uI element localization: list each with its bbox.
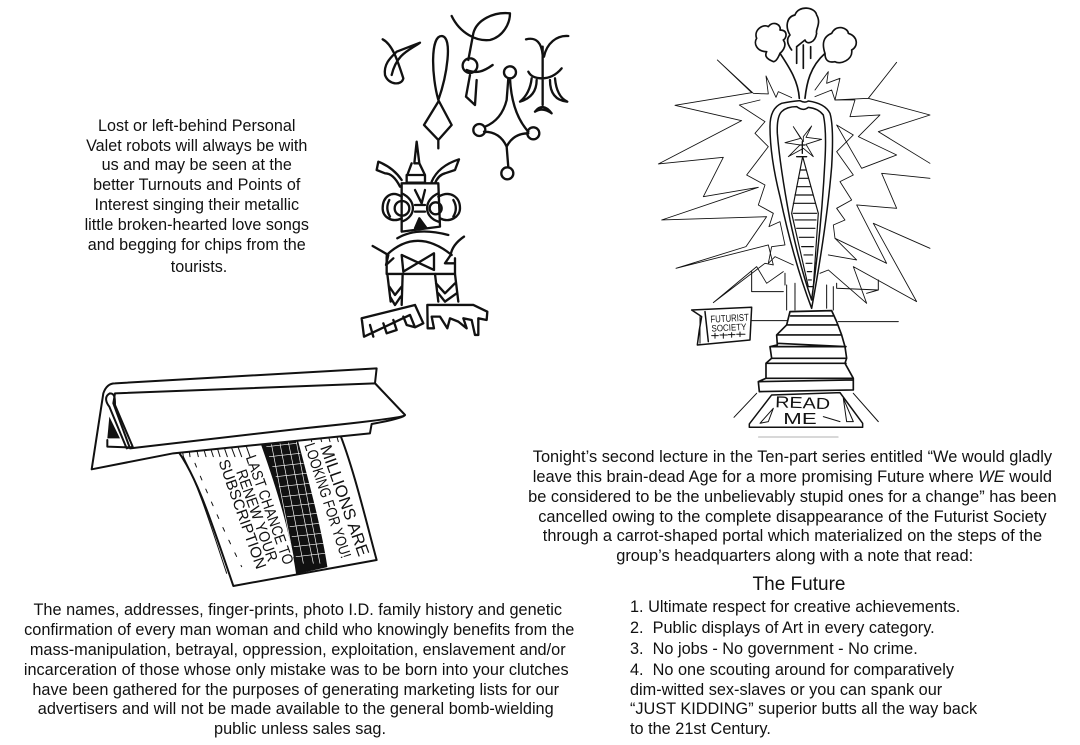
text: robots: Lost or left-behind Personal [98,117,295,135]
building behind [752,272,898,322]
read me mat: ME [783,411,817,428]
list: the future: 3. No jobs - No government - No crime. [630,640,918,658]
text: marketing lists: mass-manipulation, betrayal, oppression, exploitation, enslavement and/or [30,641,566,659]
text: lecture notice: group’s headquarters along with a note that read: [616,547,973,565]
paper: MILLIONS ARE [316,442,373,559]
read me mat [734,393,878,428]
text: robots: better Turnouts and Points of [93,176,301,194]
list: the future: 1. Ultimate respect for creative achievements. [630,598,960,616]
read me mat: READ [775,394,830,413]
tower inside carrot [792,157,818,287]
list: the future: 2. Public displays of Art in every category. [630,619,935,637]
list: the future: “JUST KIDDING” superior butts all the way back [630,700,978,718]
icon: glyph leaf [452,13,510,105]
scribble caption [758,436,838,438]
paper [172,430,377,586]
illustration: carrot portal [658,8,930,437]
icon: glyph loop and diamond [424,36,452,148]
text: marketing lists: have been gathered for the purposes of generating marketing lists for our [32,681,560,699]
text: marketing lists: confirmation of every man woman and child who knowingly benefits from the [24,621,574,639]
sign: Futurist Society [692,307,752,345]
text: marketing lists: incarceration of those whose only mistake was to be born into your clutches [24,661,569,679]
carrot outline [770,101,833,308]
illustration: mail slot [92,368,405,586]
slot frame and flap [92,368,405,469]
sign: Futurist Society: FUTURIST [710,313,749,326]
paper: SUBSCRIPTION [215,457,269,571]
star [785,126,822,157]
burst inner [739,90,897,265]
text: robots: tourists. [171,258,227,276]
text: robots: and begging for chips from the [88,236,306,254]
steps [758,311,853,392]
icon: glyph circles [473,66,539,179]
text: robots: Valet robots will always be with [86,137,307,155]
text: marketing lists: advertisers and will not be made available to the general bomb-wielding [38,700,554,718]
paper: LAST CHANCE TO [242,453,296,567]
sign: Futurist Society: SOCIETY [711,322,747,334]
text: lecture notice: cancelled owing to the complete disappearance of the Futurist Society [538,508,1047,526]
carrot leaves [755,8,856,98]
list: the future: to the 21st Century. [630,720,771,738]
text: marketing lists: public unless sales sag. [214,720,386,738]
text: robots: Interest singing their metallic [94,196,299,214]
text: robots: us and may be seen at the [102,156,292,174]
icon: glyph crescents [520,36,568,113]
list: the future: dim-witted sex-slaves or you can spank our [630,681,943,699]
text: robots: little broken-hearted love songs [85,216,309,234]
heading: The Future: The Future [753,574,845,595]
paper: RENEW YOUR [232,467,281,564]
icon: glyph one [383,39,420,83]
illustration: symbols and robot [362,13,568,337]
text: lecture notice: Tonight’s second lecture in the Ten-part series entitled “We would gladly [533,448,1053,466]
text: lecture notice: be considered to be the unbelievably stupid ones for a change” has been [528,488,1057,506]
burst outer [658,60,930,303]
text: lecture notice: through a carrot-shaped portal which materialized on the steps of the [543,527,1042,545]
text: lecture notice: leave this brain-dead Age for a more promising Future where WE would [533,468,1052,486]
list: the future: 4. No one scouting around for comparatively [630,661,955,679]
text: marketing lists: The names, addresses, finger-prints, photo I.D. family history and genetic [33,601,562,619]
icon: robot [362,142,487,337]
paper: LOOKING FOR YOU! [301,441,354,560]
